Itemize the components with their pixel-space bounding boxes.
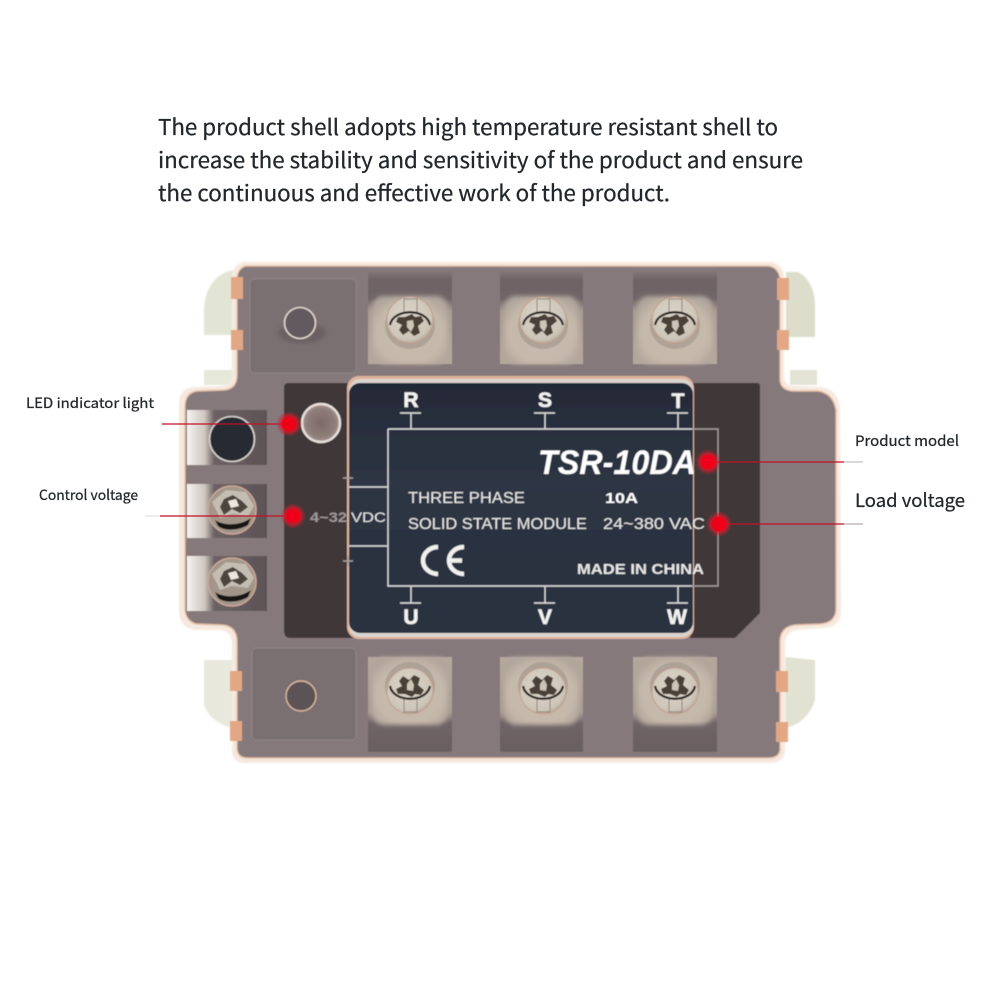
control voltage marking: 4~32	[310, 509, 347, 525]
callout: load voltage	[706, 487, 965, 537]
terminal letters: T	[672, 390, 685, 413]
callout: load voltage: Load voltage	[855, 487, 965, 513]
top terminals	[368, 268, 717, 364]
callout: LED indicator light	[26, 393, 302, 437]
callout: product model: Product model	[855, 430, 959, 451]
relay body	[179, 262, 841, 763]
mounting clips	[204, 270, 817, 728]
callout: LED indicator light: LED indicator light	[26, 393, 155, 413]
label schematic lines	[343, 413, 718, 603]
terminal letters: V	[538, 606, 552, 629]
callout: control voltage: Control voltage	[39, 485, 138, 505]
model number: TSR-10DA	[538, 444, 696, 482]
heading text	[158, 110, 803, 208]
spec text: 24~380 VAC	[603, 516, 705, 533]
top-left recess	[250, 279, 356, 373]
control voltage marking	[310, 509, 386, 525]
heading text: The product shell adopts high temperature resistant shell to	[158, 110, 778, 142]
spec text	[408, 490, 705, 578]
spec text: SOLID STATE MODULE	[408, 516, 587, 533]
terminal letters: W	[667, 606, 687, 629]
spec text: MADE IN CHINA	[577, 562, 705, 578]
callout: control voltage	[39, 485, 306, 529]
spec text: 10A	[605, 490, 638, 507]
orange corner tabs	[230, 277, 789, 742]
terminal letters	[403, 389, 687, 629]
bottom-left recess	[252, 648, 356, 740]
label plate	[347, 376, 694, 639]
dark inner panel	[284, 383, 760, 638]
left control terminals	[187, 410, 267, 611]
heading text: the continuous and effective work of the product.	[158, 176, 670, 208]
callout: product model	[695, 430, 959, 475]
LED window	[302, 404, 340, 442]
terminal letters: S	[538, 389, 552, 412]
bottom terminals	[368, 657, 717, 752]
terminal letters: U	[403, 606, 419, 629]
heading text: increase the stability and sensitivity of the product and ensure	[158, 143, 803, 175]
terminal letters: R	[403, 389, 419, 412]
control voltage marking: VDC	[351, 509, 386, 525]
spec text: THREE PHASE	[408, 490, 525, 507]
CE mark	[423, 547, 464, 574]
